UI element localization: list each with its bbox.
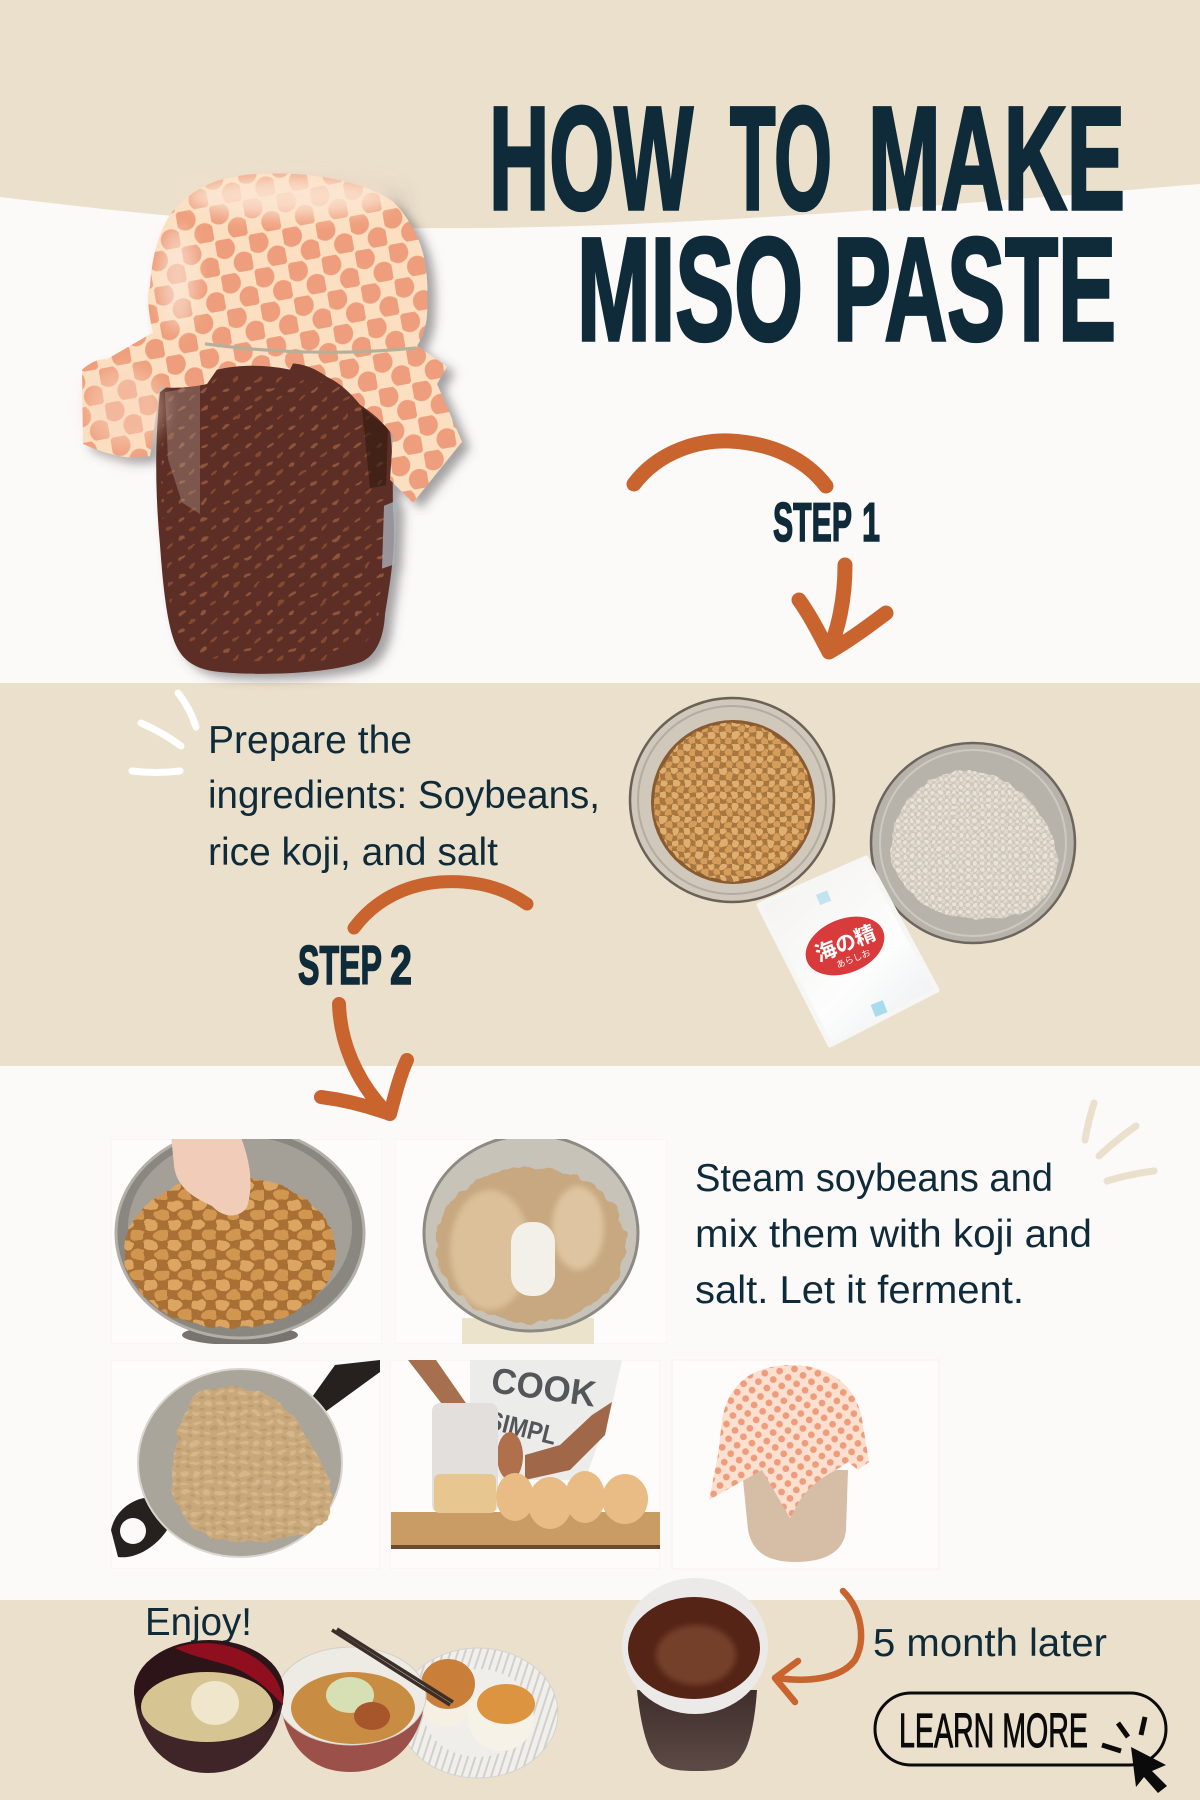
base <box>462 1318 594 1346</box>
pale cloth left <box>160 227 196 330</box>
paste <box>172 1387 333 1542</box>
curved arrow to container <box>775 1591 861 1702</box>
hand <box>171 1135 251 1216</box>
photo tile: packing paste into container <box>390 1359 660 1569</box>
container rim <box>622 1578 768 1714</box>
plate <box>398 1648 558 1778</box>
soup bowl <box>134 1640 284 1773</box>
step 1 text: rice koji, and salt <box>208 831 498 874</box>
miso container <box>622 1578 768 1771</box>
plastic wrap highlight <box>165 385 200 514</box>
step 1 text: ingredients: Soybeans, <box>208 774 600 817</box>
container body <box>637 1690 757 1771</box>
step 1 arrow down <box>799 565 886 652</box>
step 2 text: salt. Let it ferment. <box>695 1269 1024 1312</box>
salt bag: あらしお <box>835 947 872 970</box>
shirt print: SIMPL <box>485 1405 560 1451</box>
paste <box>436 1167 626 1323</box>
container paste <box>434 1474 496 1513</box>
jar body <box>156 363 394 674</box>
pale cloth top <box>185 176 395 217</box>
chopsticks <box>332 1629 453 1705</box>
step 2 label: 2 <box>390 934 412 996</box>
salt bag <box>759 858 937 1045</box>
ingredients photo <box>630 698 1075 1045</box>
container <box>742 1470 848 1562</box>
pot <box>138 1369 342 1557</box>
cloth <box>709 1365 869 1518</box>
right arm <box>525 1402 612 1480</box>
miso specks <box>161 376 388 666</box>
cursor <box>1131 1747 1167 1793</box>
left arm <box>408 1360 466 1403</box>
handle top <box>310 1360 380 1412</box>
step 1 text <box>208 719 600 874</box>
step 2 text: Steam soybeans and <box>695 1157 1053 1200</box>
enjoy label: Enjoy! <box>145 1601 252 1644</box>
five month label: 5 month later <box>873 1622 1107 1665</box>
photo tile: food processor <box>395 1135 667 1346</box>
title: HOW <box>489 77 693 241</box>
photo tile: covered container <box>672 1360 939 1569</box>
photo: served dishes <box>134 1629 558 1778</box>
ingredients band <box>0 683 1200 1066</box>
click ticks <box>1102 1717 1145 1751</box>
photo tile: soybeans in colander <box>111 1128 382 1345</box>
beans <box>124 1176 336 1328</box>
shirt print <box>493 1368 596 1445</box>
step 1 label: 1 <box>862 491 880 553</box>
salt bag: 海の精 <box>812 922 879 967</box>
pale left flap <box>85 367 165 449</box>
soybean bowl <box>630 698 834 902</box>
glass highlight <box>382 501 397 569</box>
dark fold <box>362 408 388 488</box>
bottom band <box>0 1600 1200 1800</box>
dough balls <box>496 1471 648 1529</box>
shirt <box>470 1360 622 1480</box>
container <box>432 1403 498 1513</box>
step 2 arrow arc <box>354 882 527 928</box>
rice ball 1 <box>417 1659 475 1727</box>
noodle bowl <box>276 1647 426 1772</box>
step 1 text: Prepare the <box>208 719 412 762</box>
finished miso jar photo <box>82 174 462 674</box>
handle bottom <box>111 1497 172 1557</box>
center post <box>511 1222 555 1296</box>
sparkle marks right <box>1085 1103 1154 1181</box>
colander <box>116 1128 364 1338</box>
learn more button <box>875 1693 1167 1793</box>
step 1 label: STEP <box>773 491 852 553</box>
rice koji bowl <box>871 743 1075 943</box>
rubber band <box>205 344 416 352</box>
title <box>489 77 1125 372</box>
step 2 text <box>695 1157 1092 1312</box>
colander base <box>182 1330 298 1344</box>
step 2 label: STEP <box>298 934 382 996</box>
top beige wave <box>0 0 1200 228</box>
step 2 text: mix them with koji and <box>695 1213 1092 1256</box>
rice ball 2 <box>468 1684 535 1751</box>
title: TO <box>730 77 832 241</box>
shirt print: COOK <box>489 1359 599 1415</box>
hand <box>497 1432 523 1480</box>
cutting board <box>391 1512 660 1548</box>
bowl <box>424 1135 638 1331</box>
miso surface <box>628 1597 760 1699</box>
sparkle marks left <box>132 693 196 772</box>
photo tile: mashed soybeans in pot <box>111 1360 380 1569</box>
step 2 arrow down <box>321 1004 407 1114</box>
title: MISO <box>577 208 803 372</box>
step 1 arrow arc <box>634 441 826 486</box>
cloth cover <box>82 174 462 503</box>
